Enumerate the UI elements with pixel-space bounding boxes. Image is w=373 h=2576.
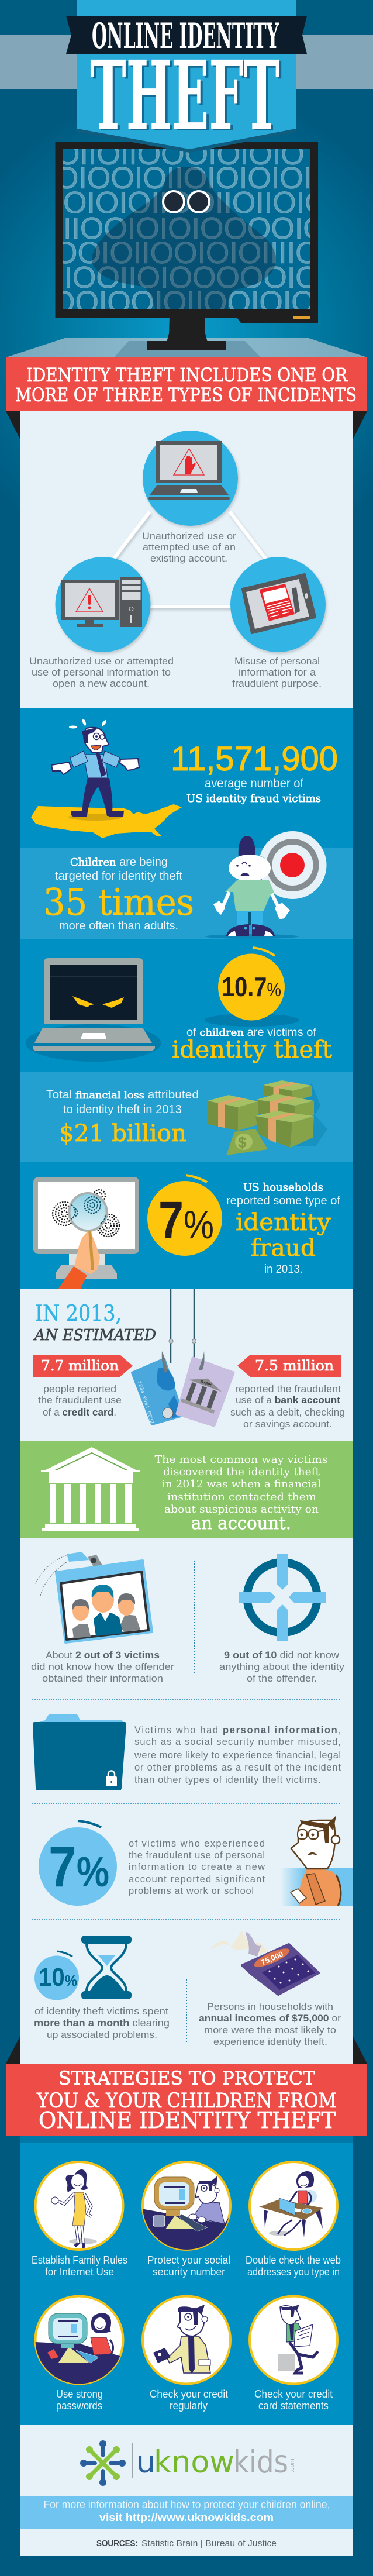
text: US households: reported some type of xyxy=(226,1194,340,1207)
icon: shocked man xyxy=(51,719,139,821)
text: work or school: information to create a new xyxy=(129,1862,265,1872)
caption row two: card statements xyxy=(258,2400,329,2412)
text: credit card xyxy=(38,1384,122,1418)
text: existing account: existing account. xyxy=(150,553,227,564)
text: work or school: of victims who experienced xyxy=(129,1838,265,1849)
text: more than a month: of identity theft victims spent xyxy=(34,2006,168,2017)
text: victims caption: US identity fraud victims xyxy=(186,793,321,805)
icon: crosshair xyxy=(239,1554,326,1641)
heading: in 2013: IN 2013, xyxy=(35,1301,122,1326)
heading: an estimated: AN ESTIMATED xyxy=(33,1327,156,1344)
caption row two: Check your credit xyxy=(254,2388,333,2400)
panel: three types of incidents xyxy=(20,411,353,708)
icon: desktop computer with warning xyxy=(55,557,151,652)
text: personal information: were more likely to experience financial, legal xyxy=(134,1750,341,1761)
title: theft xyxy=(90,40,282,153)
panel: sources: Statistic Brain | Bureau of Justice xyxy=(141,2539,277,2549)
bank emblem xyxy=(181,1373,224,1414)
caption row one: Protect your social xyxy=(147,2254,230,2266)
callout: 7.7 million xyxy=(33,1355,133,1377)
icon: ID badge with people xyxy=(36,1552,152,1642)
text: credit card: people reported xyxy=(43,1384,116,1394)
binary code pattern: OIOOIIOIOOOOOIOIO xyxy=(40,261,351,295)
binary code pattern: OIOIOIIOOIIOIIOIOIO xyxy=(63,186,360,220)
text: existing account xyxy=(142,531,237,564)
text: new account: open a new account. xyxy=(53,679,150,689)
stat: 7 percent of victims xyxy=(39,1821,117,1906)
binary code pattern: OIOOIOIIOIOIOIOIO xyxy=(55,161,336,195)
text: most common way xyxy=(154,1454,327,1534)
strategy: strong passwords xyxy=(35,2296,123,2392)
text: total financial loss xyxy=(46,1089,199,1116)
strategy: web addresses xyxy=(250,2162,337,2250)
text: fraudulent purpose: information for a xyxy=(239,667,316,678)
logo wordmark xyxy=(136,2444,296,2480)
text: annual incomes: Persons in households with xyxy=(207,2002,333,2012)
binary code pattern: IIOOIOIOIOOOOIOI xyxy=(63,212,335,246)
text: more often: more often than adults. xyxy=(59,919,178,932)
text: annual incomes xyxy=(199,2002,341,2047)
caption row two: Use strong xyxy=(56,2388,103,2400)
icon: uknowkids logo mark xyxy=(80,2440,126,2486)
caption row one xyxy=(32,2254,341,2278)
icon: money stacks: $ xyxy=(238,1134,247,1151)
panel: sources: SOURCES: xyxy=(96,2539,138,2549)
text: work or school: account reported significant xyxy=(129,1874,265,1885)
icon: calculator with receipt: 75,000 xyxy=(260,1950,285,1967)
icon: calculator with receipt xyxy=(211,1931,319,1995)
callout: 7.5 million xyxy=(237,1355,341,1377)
stat: 10.7 percent xyxy=(205,948,299,1027)
binary code pattern xyxy=(63,149,310,309)
text: children targeted: targeted for identity theft xyxy=(55,870,182,883)
logo wordmark: .com xyxy=(289,2458,296,2472)
text: annual incomes: annual incomes of $75,000 or xyxy=(199,2013,341,2024)
fingerprints xyxy=(53,1190,119,1237)
text: 9 out of 10: of the offender. xyxy=(247,1673,317,1684)
text: bank account xyxy=(230,1384,345,1430)
icon: laptop with warning xyxy=(143,431,238,526)
caption row one: Establish Family Rules xyxy=(32,2254,127,2266)
icon: bank temple xyxy=(41,1447,140,1531)
panel: financial loss xyxy=(20,1072,353,1162)
text: US households xyxy=(226,1181,340,1276)
logo wordmark: kids xyxy=(233,2444,288,2480)
text: 2 out of 3 victims: did not know how the offender xyxy=(31,1662,175,1672)
icon: money stacks xyxy=(208,1080,327,1155)
ribbon tails xyxy=(6,411,367,2064)
text: annual incomes: experience identity theft. xyxy=(213,2037,327,2047)
text: more than a month xyxy=(34,2006,170,2040)
panel: 10.7 percent of children xyxy=(20,939,353,1072)
text: most common way: The most common way victims xyxy=(154,1454,327,1466)
text: most common way: about suspicious activity on xyxy=(164,1503,319,1516)
panel: strategies xyxy=(20,2136,353,2425)
icon: computer monitor with hooded thief xyxy=(55,142,318,350)
stat: 10.7 percent: 10.7% xyxy=(222,972,281,1002)
text: 2 out of 3 victims xyxy=(31,1650,175,1684)
text: fraudulent purpose: Misuse of personal xyxy=(234,656,320,667)
icon: target xyxy=(258,831,326,899)
binary code pattern: OOIOIIOOIOIOIIIIO xyxy=(54,236,319,270)
text: bank account: such as a debit, checking xyxy=(230,1407,345,1418)
text: fraudulent purpose: fraudulent purpose. xyxy=(232,679,322,689)
stat: 35 times: 35 times xyxy=(43,881,194,924)
text: total financial loss: Total financial loss attributed xyxy=(46,1089,199,1101)
text: 9 out of 10 xyxy=(219,1650,345,1684)
text: personal information: such as a social security number misused, xyxy=(134,1737,341,1747)
panel: victims facts xyxy=(20,1538,353,2064)
text: bank account: use of a bank account xyxy=(236,1395,341,1406)
title banner xyxy=(66,0,307,153)
stat: 10 percent xyxy=(34,1951,79,2000)
caption row two xyxy=(56,2388,333,2412)
text: annual incomes: more were the most likely to xyxy=(204,2025,336,2036)
stat: 21 billion: $21 billion xyxy=(59,1120,186,1147)
text: new account: Unauthorized use or attempted xyxy=(29,656,174,667)
panel: more information: visit http://www.uknowkids.com xyxy=(99,2512,274,2523)
caption row one: for Internet Use xyxy=(45,2266,114,2278)
text: US households: US households xyxy=(243,1181,323,1194)
text: most common way: discovered the identity theft xyxy=(163,1466,320,1478)
caption row two: regularly xyxy=(170,2400,208,2412)
caption row one: Double check the web xyxy=(246,2254,341,2266)
callout: 7.7 million: 7.7 million xyxy=(41,1358,119,1374)
heading: strategies to protect: ONLINE IDENTITY THEFT xyxy=(39,2107,336,2133)
caption row one: security number xyxy=(153,2266,225,2278)
icon: locked folder xyxy=(33,1714,126,1790)
text: bank account: reported the fraudulent xyxy=(235,1384,341,1394)
text: existing account: Unauthorized use or xyxy=(142,531,237,542)
text: total financial loss: to identity theft in 2013 xyxy=(63,1103,182,1116)
icon: hourglass xyxy=(81,1936,132,1999)
heading: strategies to protect xyxy=(6,2064,367,2136)
text: children targeted: Children are being xyxy=(70,856,168,869)
heading: identity theft includes xyxy=(6,357,367,411)
people in badge xyxy=(72,1585,140,1638)
panel: most common way discovered xyxy=(20,1441,353,1538)
strategy: family rules xyxy=(35,2162,123,2250)
panel: in 2013 an estimated xyxy=(20,1289,353,1441)
connector lines xyxy=(107,512,272,607)
icon: laptop with evil eyes xyxy=(26,958,161,1062)
icon: worried child xyxy=(205,836,299,939)
stat: 7 percent of victims: 7% xyxy=(49,1834,109,1899)
stat: victims count: 11,571,900 xyxy=(171,740,338,778)
panel: children 35 times xyxy=(20,831,353,939)
text: victims caption: average number of xyxy=(205,777,303,790)
strategy: card statements xyxy=(250,2296,337,2384)
text: US households: fraud xyxy=(251,1235,316,1262)
text: personal information xyxy=(134,1725,341,1785)
strategy: social security xyxy=(140,2162,230,2258)
caption row two: Check your credit xyxy=(150,2388,228,2400)
text: personal information: than other types of identity theft victims. xyxy=(134,1775,321,1785)
binary code pattern: OIIOIIOOOIOIOIO xyxy=(56,137,305,171)
strategy: check credit xyxy=(143,2296,230,2384)
panel: sources xyxy=(20,2529,353,2556)
icon: hooked credit card and bank card xyxy=(132,1289,233,1425)
stat: 7 percent xyxy=(147,1175,222,1256)
text: most common way: in 2012 was when a financial xyxy=(162,1478,321,1490)
text: credit card: the fraudulent use xyxy=(38,1395,122,1406)
caption row one: addresses you type in xyxy=(247,2266,340,2278)
caption row two: passwords xyxy=(56,2400,102,2412)
text: most common way: an account. xyxy=(191,1513,291,1534)
icon: monitor with magnifier and fingerprints xyxy=(33,1177,139,1289)
eyes xyxy=(163,191,209,212)
text: 2 out of 3 victims: obtained their information xyxy=(42,1673,163,1684)
text: more than a month: more than a month clearing xyxy=(34,2018,170,2029)
logo wordmark: u xyxy=(136,2444,156,2480)
stat: 10 percent: 10% xyxy=(39,1963,77,1992)
panel: more information xyxy=(20,2496,353,2529)
text: bank account: or savings account. xyxy=(243,1419,332,1430)
icon: hooked credit card and bank card: 1234 0001 0032 xyxy=(136,1380,155,1424)
text: existing account: attempted use of an xyxy=(143,542,236,553)
panel: logo xyxy=(20,2425,353,2496)
panel: more information: For more information about how to protect your children online, xyxy=(43,2499,330,2510)
logo wordmark: know xyxy=(154,2444,234,2480)
text: personal information: Victims who had personal information, xyxy=(134,1725,341,1735)
heading: strategies to protect: STRATEGIES TO PROTECT xyxy=(58,2067,316,2089)
desk xyxy=(6,338,367,357)
text: US households: identity xyxy=(236,1209,331,1236)
panel: 7 percent of US households xyxy=(20,1162,353,1289)
text: US households: in 2013. xyxy=(264,1263,303,1276)
callout: 7.5 million: 7.5 million xyxy=(255,1358,334,1374)
icon: tablet with document xyxy=(230,557,326,652)
text: credit card: of a credit card. xyxy=(43,1407,116,1418)
text: victims caption xyxy=(186,777,321,805)
text: fraudulent purpose xyxy=(232,656,322,689)
icon: US map xyxy=(31,804,182,838)
heading: identity theft: identity theft xyxy=(172,1036,332,1063)
text: of children are victims: of children are victims of xyxy=(186,1027,317,1039)
panel: 11,571,900 victims xyxy=(20,708,353,848)
stat: 7 percent: 7% xyxy=(158,1191,214,1250)
text: 9 out of 10: 9 out of 10 did not know xyxy=(224,1650,339,1661)
text: 2 out of 3 victims: About 2 out of 3 victims xyxy=(46,1650,160,1661)
text: work or school: the fraudulent use of personal xyxy=(129,1850,265,1861)
icon: worried man reading xyxy=(281,1816,353,1906)
text: new account: use of personal information to xyxy=(32,667,171,678)
text: most common way: institution contacted them xyxy=(167,1491,316,1503)
text: work or school: problems at work or school xyxy=(129,1886,254,1896)
text: children targeted xyxy=(55,856,182,883)
text: more than a month: up associated problems. xyxy=(47,2030,157,2040)
hooded silhouette xyxy=(92,167,276,309)
bank emblem: BANK xyxy=(199,1380,212,1388)
text: new account xyxy=(29,656,174,689)
binary code pattern: OOIOOIOIIOOIOIO xyxy=(51,285,315,319)
heading: strategies to protect: YOU & YOUR CHILDREN FROM xyxy=(36,2089,337,2113)
text: personal information: or other problems as a result of the incident xyxy=(134,1762,341,1773)
text: work or school xyxy=(129,1838,265,1896)
text: 9 out of 10: anything about the identity xyxy=(219,1662,345,1672)
